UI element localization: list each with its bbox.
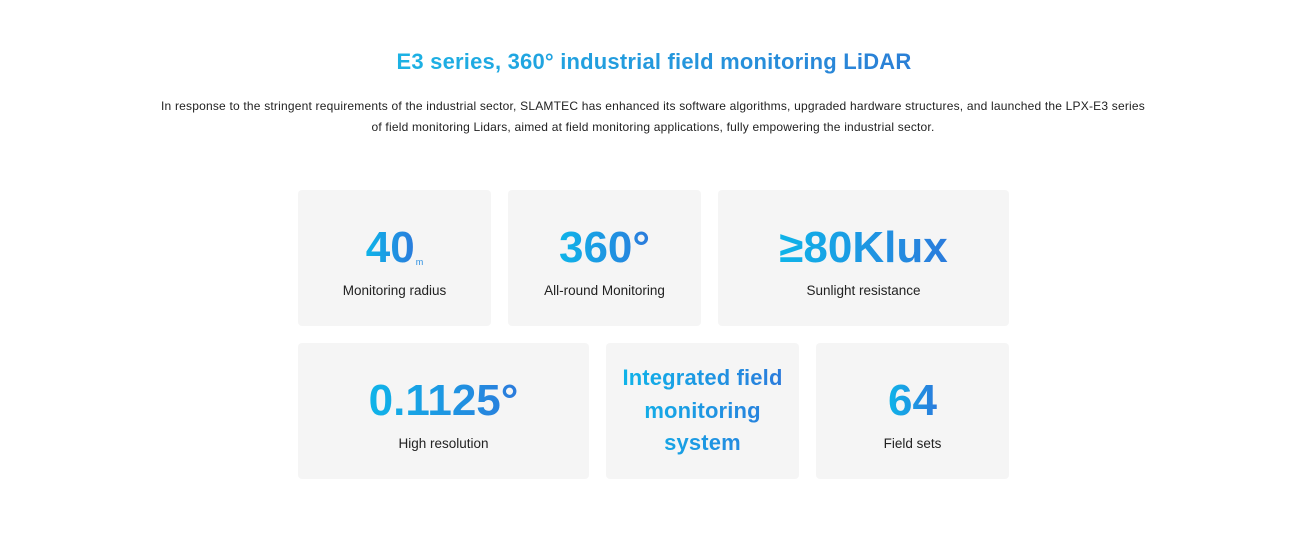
intro text — [161, 99, 1145, 134]
panel: all-round monitoring — [508, 190, 701, 326]
panel: integrated field monitoring system — [606, 343, 799, 479]
panel: high resolution — [298, 343, 589, 479]
panel: field sets — [816, 343, 1009, 479]
label: high resolution: High resolution — [398, 436, 489, 451]
stat: 0.1125 degrees: 0.1125° — [369, 376, 518, 425]
intro text: of field monitoring Lidars, aimed at field monitoring applications, fully empowering the industrial sector. — [371, 120, 934, 134]
stat: 80 klux: ≥80Klux — [779, 223, 948, 272]
stat text: integrated field monitoring system: Integrated field — [622, 365, 783, 390]
stat: 360 degrees: 360° — [559, 223, 650, 272]
stat: 64: 64 — [888, 376, 937, 425]
stat: 40 m: m — [416, 257, 423, 267]
intro text: In response to the stringent requirements of the industrial sector, SLAMTEC has enhanced its software algorithms, upgraded hardware structures, and launched the LPX-E3 series — [161, 99, 1145, 113]
panel: sunlight resistance — [718, 190, 1009, 326]
label: sunlight resistance: Sunlight resistance — [806, 283, 921, 298]
stat text: integrated field monitoring system — [622, 365, 783, 455]
label: field sets: Field sets — [884, 436, 941, 451]
label: monitoring radius: Monitoring radius — [343, 283, 446, 298]
stat text: integrated field monitoring system: monitoring — [644, 398, 761, 422]
label: all-round monitoring: All-round Monitoring — [544, 283, 665, 298]
title: E3 series, 360° industrial field monitoring LiDAR — [397, 49, 911, 74]
panel: monitoring radius — [298, 190, 491, 326]
stat: 40 m: 40 — [366, 223, 415, 272]
stat text: integrated field monitoring system: system — [664, 430, 741, 455]
